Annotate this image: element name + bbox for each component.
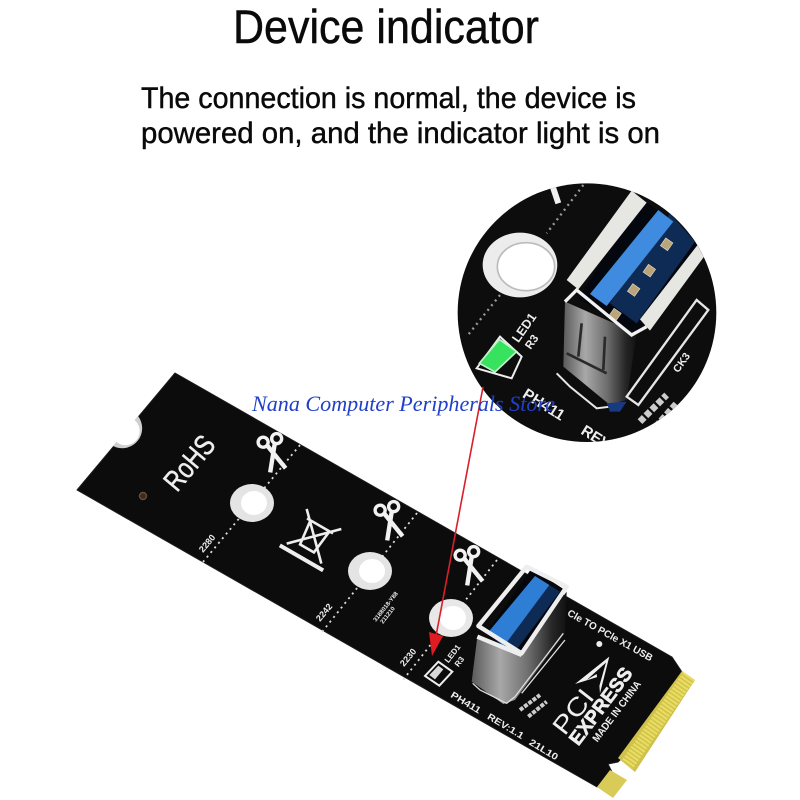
inset disc	[458, 183, 716, 442]
small via	[140, 492, 146, 500]
PH411 label: PH411	[520, 386, 568, 425]
shell cutouts	[567, 323, 607, 373]
blue base glint	[607, 402, 627, 412]
Made in China: MADE IN CHINA	[591, 679, 644, 744]
USB port shell	[472, 592, 567, 704]
red pointer arrow	[429, 387, 483, 656]
USB white rim	[477, 567, 567, 655]
USB right outline	[515, 633, 565, 697]
R3 label: R3	[523, 333, 541, 352]
LED footprint	[477, 337, 522, 378]
blue tongue	[590, 210, 673, 306]
via	[596, 641, 602, 647]
PCI Express logo wing	[575, 657, 609, 693]
length markings: 211210	[380, 605, 397, 625]
description text	[141, 82, 660, 150]
magnified inset	[458, 183, 716, 454]
length markings: 3188018-Y88	[373, 591, 400, 623]
mounting hole 2	[348, 552, 392, 590]
USB shell	[563, 302, 637, 405]
pins	[609, 238, 673, 321]
white rim	[565, 290, 647, 335]
green LED light	[479, 339, 517, 372]
perforation cut lines	[203, 445, 497, 680]
description text: powered on, and the indicator light is on	[141, 117, 660, 150]
perforation	[467, 185, 583, 337]
description text: The connection is normal, the device is	[141, 82, 636, 115]
length markings: 2280	[197, 533, 217, 554]
revision text: 21L10	[527, 737, 560, 762]
LED pad	[429, 666, 443, 679]
board body	[77, 373, 682, 787]
RoHS label: RoHS	[158, 429, 222, 497]
revision text: REV:1.1	[486, 711, 526, 741]
CK3 label: CK3	[671, 351, 693, 375]
M.2 circuit board	[77, 373, 695, 798]
dark blue interior	[610, 213, 695, 323]
board details	[425, 567, 654, 762]
PCIe X1 label: Cle TO PCle X1 USB	[565, 608, 654, 664]
PCI text: PCI	[547, 684, 600, 740]
LED1 label: LED1	[509, 310, 539, 345]
revision text: PH411	[449, 690, 483, 716]
length markings	[197, 533, 418, 668]
REV label: REV	[578, 422, 614, 454]
LED label: LED1	[443, 642, 463, 665]
gold finger small	[597, 770, 627, 798]
resistor block	[638, 392, 678, 424]
mounting hole 3	[429, 599, 473, 637]
USB bottom outline	[473, 683, 515, 703]
white bar bottom	[640, 244, 706, 331]
USB blue tongue	[487, 576, 549, 646]
length markings: 2242	[314, 602, 334, 623]
scissors fragment	[552, 183, 558, 203]
crossed-out bin icon	[280, 506, 346, 570]
USB dark blue interior	[502, 583, 560, 652]
length markings: 2230	[398, 647, 418, 668]
mounting hole 1	[230, 484, 274, 522]
USB opening	[578, 198, 707, 333]
port base outline	[556, 372, 608, 410]
mounting hole	[483, 233, 557, 297]
scissors icon 2	[374, 500, 407, 541]
scissors icon 3	[454, 545, 487, 586]
white bar top	[567, 191, 647, 289]
EXPRESS text: EXPRESS	[566, 664, 638, 750]
R3 label: R3	[453, 655, 467, 669]
USB port opening	[487, 568, 565, 655]
title: Device indicator	[233, 0, 539, 53]
LED footprint	[425, 662, 452, 686]
wing cut	[587, 663, 606, 688]
gold finger large	[618, 671, 695, 772]
revision text	[449, 690, 560, 762]
mounting notch	[110, 414, 142, 448]
pin resistors	[520, 695, 547, 717]
scissors icon 1	[257, 432, 290, 473]
CK3 outline	[627, 300, 708, 405]
store watermark: Nana Computer Peripherals Store	[251, 391, 555, 416]
